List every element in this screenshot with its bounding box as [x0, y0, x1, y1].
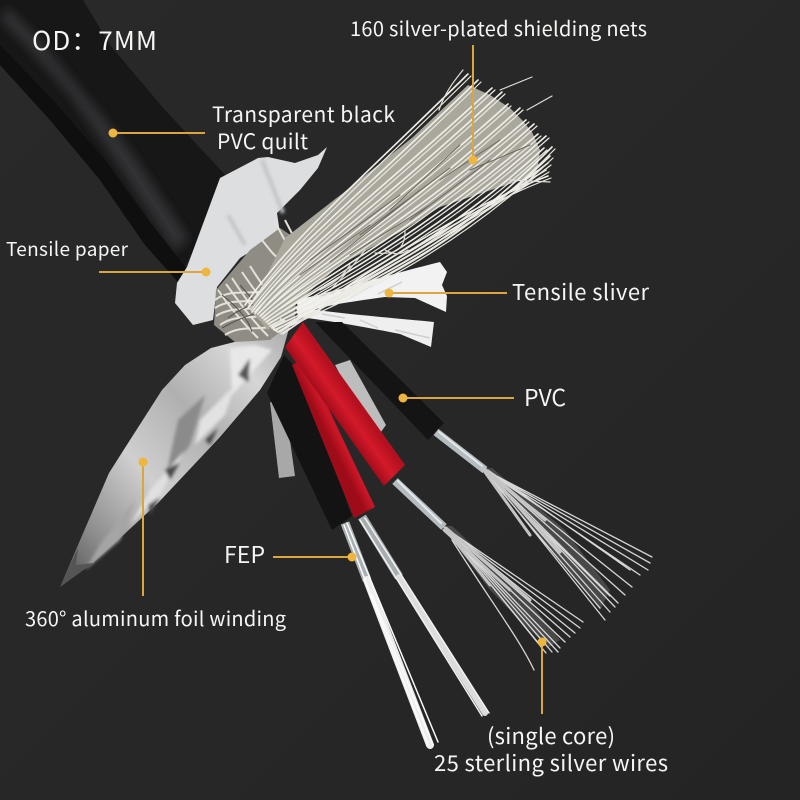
sliver behind cores — [335, 360, 386, 440]
back PVC core: black — [315, 322, 444, 440]
label: tensile paper: Tensile paper — [6, 235, 129, 262]
conductor: black PVC core — [436, 432, 652, 620]
leader: PVC — [398, 394, 514, 402]
tensile paper wrap — [175, 147, 327, 325]
label: silver wires: 25 sterling silver wires — [434, 746, 668, 778]
braided shield base — [214, 220, 298, 342]
outer black PVC cable — [0, 0, 228, 282]
leader: tensile paper — [99, 268, 210, 276]
leader: tensile sliver — [384, 288, 507, 298]
label: silver wires: (single core) — [487, 719, 615, 751]
conductor: small red core — [360, 517, 489, 716]
aluminum foil winding — [60, 325, 290, 587]
second PVC core: red — [292, 358, 375, 518]
label: transparent black PVC quilt: Transparent black — [212, 99, 395, 129]
label: shielding nets: 160 silver-plated shielding nets — [350, 13, 647, 42]
label: PVC: PVC — [524, 379, 566, 413]
conductor: small black core — [344, 523, 438, 745]
leader: aluminum foil — [138, 458, 148, 596]
leader: shielding nets — [468, 45, 478, 164]
silver-plated shielding net wires — [245, 70, 555, 334]
label: tensile sliver: Tensile sliver — [512, 275, 649, 307]
tensile sliver strands — [270, 262, 447, 478]
label: aluminum foil winding: 360° aluminum foil winding — [25, 603, 286, 632]
label: FEP: FEP — [224, 536, 265, 570]
leader: FEP — [273, 552, 356, 562]
label: silver wires — [434, 719, 668, 778]
label: transparent black PVC quilt: PVC quilt — [217, 126, 308, 156]
silver-coated conductors and wire fans — [344, 432, 652, 745]
leader: silver wires — [538, 638, 546, 714]
conductor: big red core — [395, 481, 583, 670]
leader: outer cable — [108, 128, 205, 138]
second PVC core: black — [267, 355, 352, 530]
label: transparent black PVC quilt — [212, 99, 395, 156]
front PVC core: red — [285, 322, 405, 486]
label: outer diameter: OD：7MM — [32, 21, 157, 58]
